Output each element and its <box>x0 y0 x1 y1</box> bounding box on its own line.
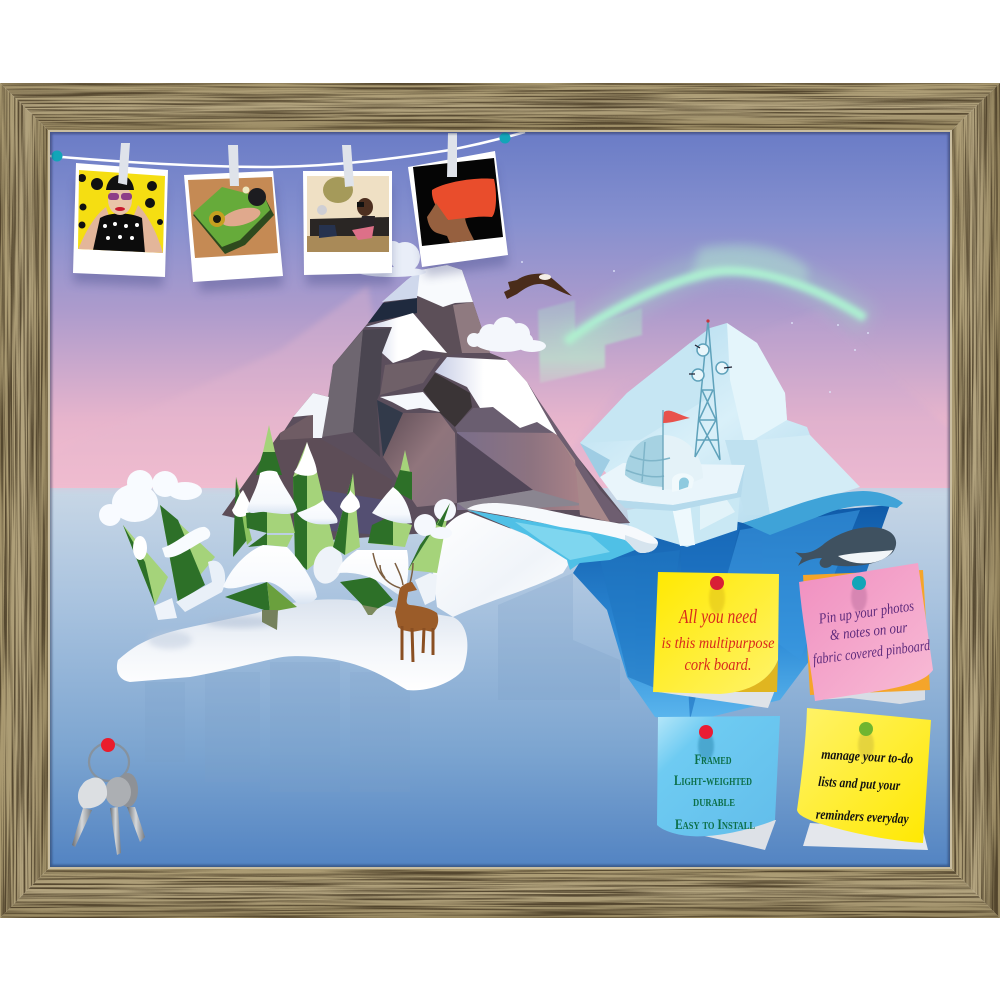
tree behind left <box>232 477 252 557</box>
water reflections <box>145 573 620 792</box>
photo 2 clip <box>228 145 239 186</box>
antenna tower <box>689 319 732 460</box>
note 2 text: & notes on our <box>829 620 908 644</box>
pin: red <box>710 576 724 590</box>
igloo <box>625 435 703 492</box>
note 2 text: Pin up your photos <box>817 598 915 628</box>
note 4 text: reminders everyday <box>815 808 910 827</box>
main centre tree <box>223 425 317 630</box>
board background <box>50 132 950 868</box>
note 1: yellow multipurpose <box>653 572 779 708</box>
frame left <box>0 83 50 918</box>
photo 4 polaroid <box>405 151 510 267</box>
snow shelf <box>430 503 658 617</box>
tree right <box>337 450 412 615</box>
photo 3 polaroid <box>303 171 392 275</box>
deer <box>373 553 438 662</box>
note 4 text: lists and put your <box>818 775 901 794</box>
iceberg blue rim <box>743 491 903 535</box>
note 3 text: Light-weighted <box>674 773 752 789</box>
mountain <box>222 265 630 540</box>
note 4: yellow to-do <box>797 708 931 850</box>
photo 1 polaroid <box>73 163 170 277</box>
pin: red <box>699 725 713 739</box>
frame bottom <box>0 867 1000 918</box>
keys <box>72 738 145 855</box>
note 1 text: is this multipurpose <box>662 635 774 652</box>
frame inner edge <box>49 131 951 868</box>
flag <box>663 410 690 490</box>
mountain snow caps <box>293 265 557 438</box>
pin: green <box>859 722 873 736</box>
iceberg underwater <box>573 505 890 722</box>
stars <box>521 261 869 393</box>
note 3 text: Framed <box>694 752 732 768</box>
pin: teal <box>852 576 866 590</box>
note 3 text: Easy to Install <box>675 817 755 833</box>
photo 2 polaroid <box>184 171 283 282</box>
frame top <box>0 83 1000 132</box>
note 1 text: All you need <box>677 606 758 628</box>
note 4 text <box>815 748 914 827</box>
pin on key ring <box>101 738 115 752</box>
note 4 text: manage your to-do <box>821 748 914 767</box>
hanging string <box>50 132 525 167</box>
iceberg above water <box>580 323 860 523</box>
board inner shadow <box>50 132 950 867</box>
note 3 text <box>674 752 755 833</box>
string pin right <box>500 132 510 144</box>
note 1 text <box>662 606 774 674</box>
notes <box>653 563 933 850</box>
note 3: blue framed <box>657 716 780 850</box>
whale <box>795 527 896 568</box>
tree behind centre right <box>293 442 342 584</box>
photo 4 clip <box>447 133 457 177</box>
photo 3 clip <box>342 145 354 187</box>
snow island <box>117 599 467 690</box>
mountain light rays in sky <box>246 287 947 487</box>
note 2 text <box>812 598 931 668</box>
igloo platform <box>600 463 745 547</box>
note 1 text: cork board. <box>684 655 752 674</box>
frame right <box>950 83 1000 918</box>
eagle <box>504 274 572 299</box>
note 3 text: durable <box>693 794 735 810</box>
snowy tree: left tilted with cloud of snow <box>99 470 225 612</box>
tree far right tilted <box>408 499 456 605</box>
string pin left <box>52 150 62 162</box>
snowy tree: far left tilted <box>123 525 177 620</box>
aurora <box>538 245 868 383</box>
tree small right centre <box>333 473 360 555</box>
note 2 text: fabric covered pinboard <box>812 638 931 668</box>
note 2: pink pin up <box>799 563 933 704</box>
photo 1 clip <box>118 143 130 185</box>
clouds <box>358 241 546 352</box>
polaroid shadows <box>73 165 508 292</box>
